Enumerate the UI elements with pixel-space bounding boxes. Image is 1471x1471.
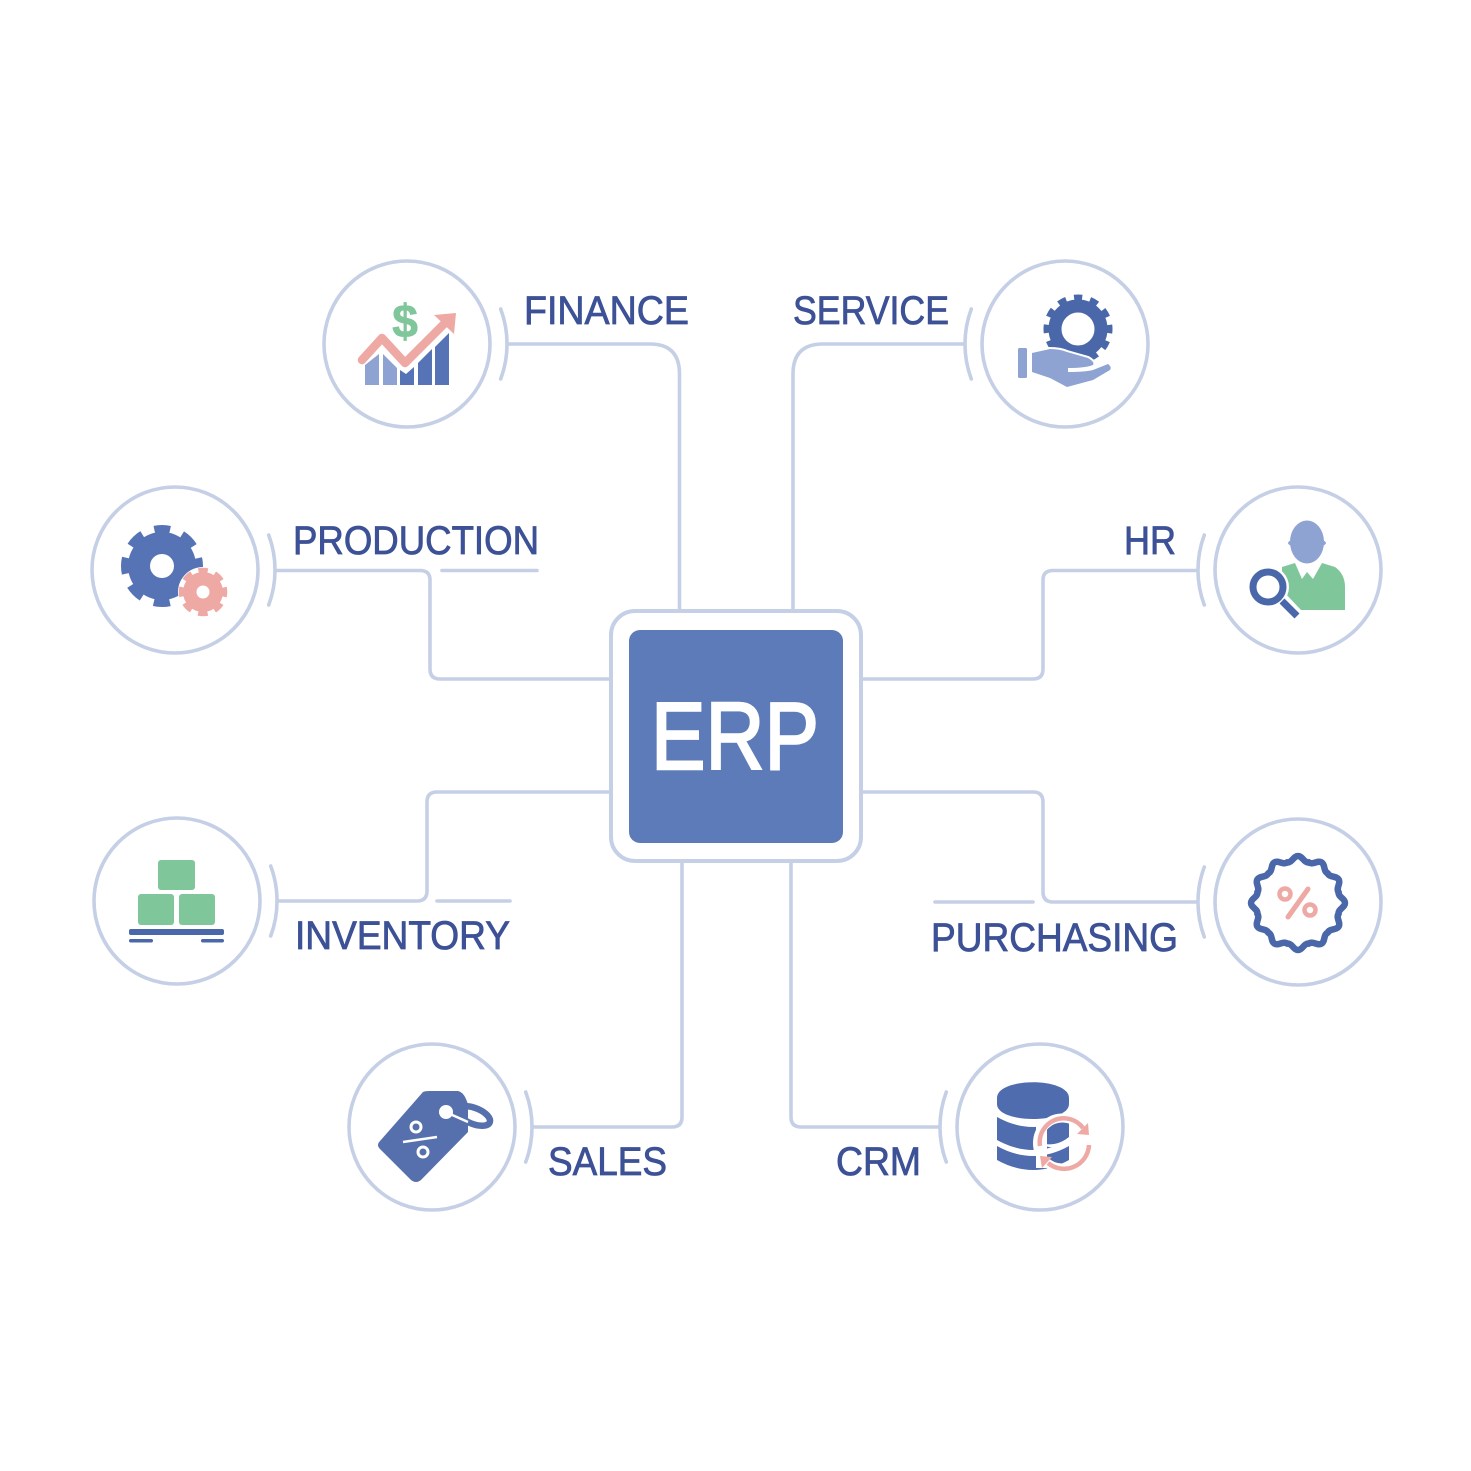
connector: crm <box>791 862 940 1127</box>
icon: database sync <box>997 1082 1089 1170</box>
panel: purchasing <box>931 819 1381 985</box>
connector: production <box>275 570 610 679</box>
label: sales: SALES <box>548 1140 667 1184</box>
panel: production <box>92 487 539 653</box>
connector: hr <box>862 570 1197 679</box>
label: production: PRODUCTION <box>293 519 539 563</box>
icon: gears <box>126 530 228 617</box>
icon: price tag <box>378 1091 493 1182</box>
label: purchasing: PURCHASING <box>931 916 1178 960</box>
icon: finance chart <box>360 295 456 385</box>
panel: finance <box>324 261 689 427</box>
panel: sales <box>349 1044 667 1210</box>
connector: finance <box>507 344 680 610</box>
label: inventory: INVENTORY <box>295 914 510 958</box>
icon: hand holding gear <box>1018 299 1111 387</box>
icon: person with magnifier <box>1247 520 1345 616</box>
panel: inventory <box>94 818 510 984</box>
label: service: SERVICE <box>793 289 949 333</box>
icon: finance chart: $ <box>392 295 418 347</box>
connector: purchasing <box>862 792 1197 902</box>
central ERP block: ERP <box>651 683 819 790</box>
central ERP block <box>611 611 861 861</box>
panel: hr <box>1124 487 1381 653</box>
panel: crm <box>836 1044 1123 1210</box>
connector: inventory <box>277 792 610 901</box>
panel: service <box>793 261 1148 427</box>
icon: discount badge <box>1251 856 1345 950</box>
connector: sales <box>532 862 682 1127</box>
connector: service <box>793 344 965 610</box>
label: crm: CRM <box>836 1140 921 1184</box>
icon: boxes on pallet <box>129 860 224 942</box>
label: hr: HR <box>1124 519 1176 563</box>
label: finance: FINANCE <box>524 289 689 333</box>
